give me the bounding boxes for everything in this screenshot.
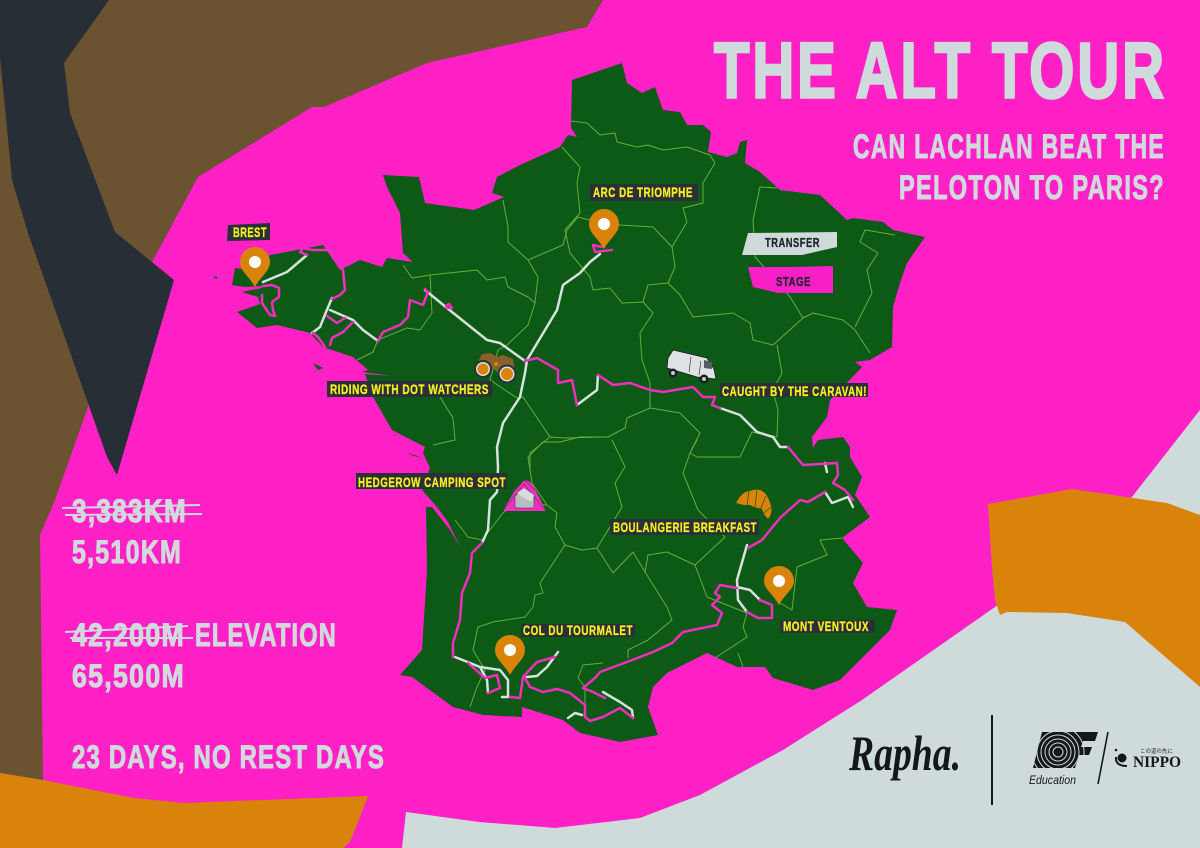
logo: Nippo: NIPPO — [1133, 754, 1181, 771]
legend: transfer — [742, 232, 837, 255]
pin: Col du Tourmalet — [495, 635, 525, 675]
icon: caravan van — [667, 350, 716, 384]
label: Boulangerie breakfast — [610, 519, 759, 535]
icon: tent — [503, 480, 546, 511]
logo slash — [1098, 732, 1108, 784]
stat: elevation — [65, 617, 337, 694]
pin: Brest — [240, 247, 270, 287]
label: Mont Ventoux: MONT VENTOUX — [783, 619, 869, 634]
logo: Nippo: この道の先に — [1140, 747, 1173, 755]
subtitle — [853, 128, 1165, 207]
label: Col du Tourmalet: COL DU TOURMALET — [523, 623, 633, 638]
stat: days: 23 DAYS, NO REST DAYS — [72, 739, 385, 775]
legend: transfer: TRANSFER — [765, 235, 820, 250]
stat: elevation: ELEVATION — [195, 617, 337, 653]
stat: distance: 3,383KM — [72, 493, 187, 529]
pin: Arc de Triomphe — [589, 209, 619, 249]
label: Brest: BREST — [233, 225, 267, 240]
legend: stage — [748, 266, 833, 293]
stat: elevation: 65,500M — [72, 658, 185, 694]
label: Arc de Triomphe: ARC DE TRIOMPHE — [593, 185, 693, 200]
logo: EF Education — [1029, 732, 1098, 784]
label: Caught by the caravan — [720, 383, 868, 399]
label: Hedgerow camping spot: HEDGEROW CAMPING SPOT — [358, 475, 506, 490]
divider — [991, 715, 993, 805]
map of France with regions — [213, 63, 925, 742]
stat: distance — [62, 493, 202, 570]
pin: Mont Ventoux — [764, 566, 794, 605]
icon: croissant — [736, 490, 771, 518]
label: Riding with dot watchers: RIDING WITH DOT WATCHERS — [330, 382, 489, 397]
stat: distance: 5,510KM — [72, 534, 182, 570]
legend: stage: STAGE — [776, 274, 811, 289]
logo: Rapha: Rapha. — [848, 725, 961, 781]
label: Brest — [227, 223, 270, 241]
label: Caught by the caravan: CAUGHT BY THE CARAVAN! — [722, 384, 867, 399]
routes: transfer and stage lines — [262, 245, 853, 721]
logo: Nippo — [1115, 747, 1181, 771]
logo: EF Education: Education — [1029, 773, 1076, 787]
icon: binoculars — [474, 353, 516, 384]
label: Hedgerow camping spot — [356, 473, 507, 490]
label: Arc de Triomphe — [590, 184, 698, 201]
stat: elevation: 42,200M — [72, 617, 185, 653]
label: Boulangerie breakfast: BOULANGERIE BREAKFAST — [613, 520, 757, 535]
